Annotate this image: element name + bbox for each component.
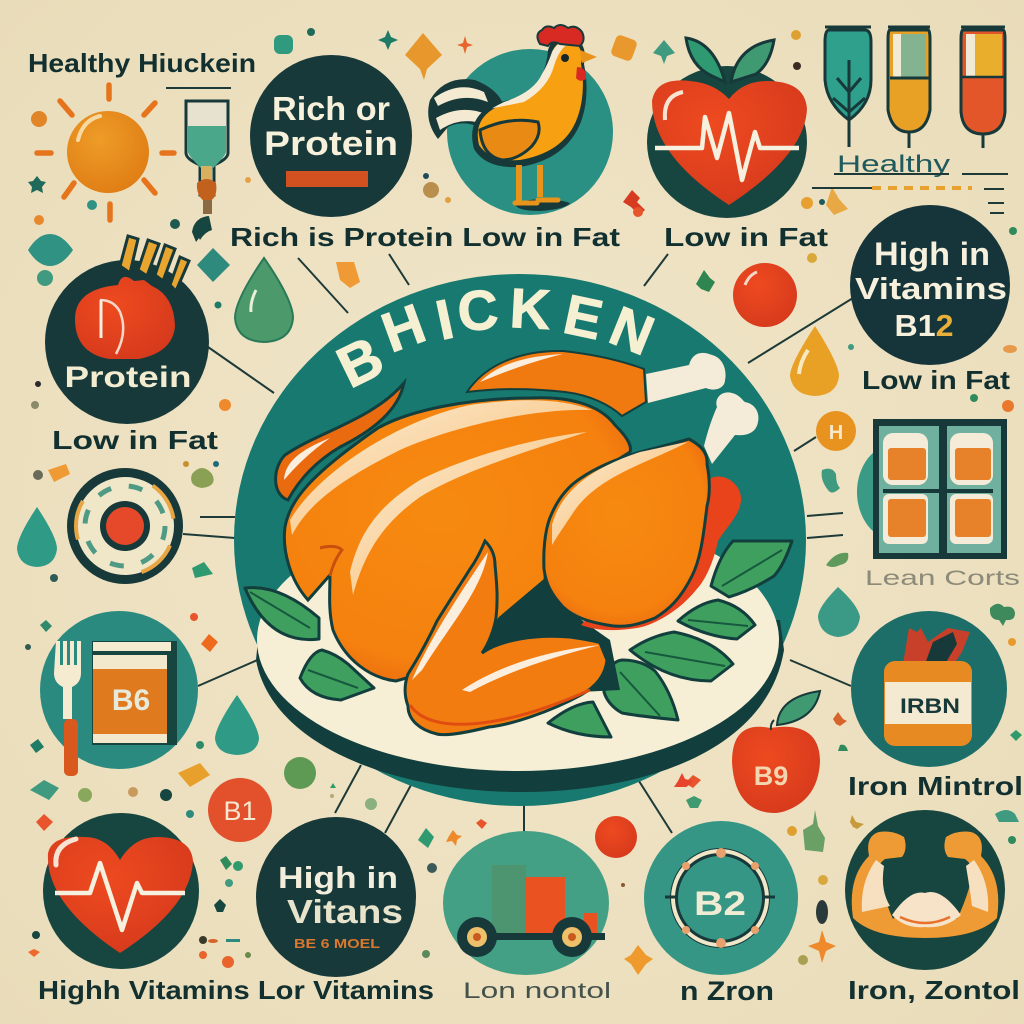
- red rim behind thigh: [581, 477, 741, 630]
- label: low in fat right: Low in Fat: [862, 365, 1010, 395]
- badge: high in vitamins b12: Vitamins: [855, 271, 1007, 306]
- badge: high in vitamins b12: [850, 205, 1010, 365]
- connector lines: [183, 254, 853, 833]
- bottom label: high vitamins: Highh Vitamins Lor Vitamins: [38, 975, 434, 1005]
- wing upper left: [276, 383, 404, 500]
- icon: test tubes: [825, 27, 1005, 148]
- label: healthy: [812, 151, 1008, 213]
- title arc: B: [327, 324, 393, 401]
- icon: cabinet of cuts: [857, 419, 1007, 559]
- icon: iron jar: [851, 611, 1007, 767]
- plate: [257, 509, 779, 771]
- badge: rich of protein: Rich or: [272, 90, 390, 127]
- label: iron mintrol: Iron Mintrol: [848, 771, 1023, 801]
- icon: heart with pulse: [647, 38, 807, 218]
- badge: protein: [45, 236, 209, 424]
- icon: small amber badge: [816, 411, 856, 451]
- lower wing: [405, 541, 607, 735]
- plate rim: [256, 620, 784, 792]
- icon: target dial: [67, 468, 183, 584]
- label: low in fat: Low in Fat: [664, 222, 828, 252]
- main plate circle: [234, 274, 806, 806]
- badge: high in vitans: [256, 817, 416, 977]
- title arc: [327, 276, 663, 401]
- icon: red ball: [733, 263, 797, 327]
- icon: apple b9: [732, 691, 820, 813]
- icon: water drop: [235, 258, 293, 342]
- icon: teal drop small: [215, 695, 259, 755]
- body: [284, 398, 630, 681]
- title arc: I: [430, 287, 459, 352]
- title arc: H: [374, 291, 433, 364]
- badge: rich of protein: [250, 55, 412, 217]
- badge: high in vitans: BE 6 MOEL: [294, 936, 380, 951]
- badge: b2: [644, 821, 798, 975]
- icon: amber drop: [790, 326, 839, 396]
- icon: teal drop: [17, 507, 57, 567]
- title arc: C: [455, 277, 500, 343]
- icon: teal drop right: [818, 587, 860, 637]
- badge: b2: B2: [694, 885, 746, 923]
- badge: high in vitans: Vitans: [287, 893, 403, 930]
- dark gap: [420, 525, 620, 700]
- bottom label: lon nontol: Lon nontol: [463, 978, 611, 1003]
- badge: b1: B1: [223, 796, 257, 826]
- badge: rich of protein: Protein: [264, 125, 398, 163]
- icon: small amber badge: H: [829, 422, 843, 444]
- icon: truck: [443, 831, 609, 975]
- badge: protein: Protein: [64, 361, 192, 394]
- title arc: E: [559, 282, 608, 352]
- icon: red ball small: [595, 816, 637, 858]
- icon: sun: [37, 85, 174, 220]
- icon: fork and b6 jar: B6: [112, 684, 150, 717]
- badge: b1: [208, 778, 272, 842]
- icon: fork and b6 jar: [40, 611, 198, 776]
- title arc: K: [508, 276, 552, 341]
- label: rich is protein low in fat: Rich is Protein Low in Fat: [230, 222, 620, 252]
- badge: high in vitamins b12: B12: [894, 308, 954, 343]
- icon: rooster: [428, 25, 613, 215]
- icon: iron jar: IRBN: [900, 695, 960, 718]
- back drumstick: [467, 351, 726, 416]
- label: lean corts: Lean Corts: [865, 567, 1020, 590]
- title arc: N: [602, 294, 663, 367]
- icon: muscles: [845, 810, 1005, 970]
- bottom label: iron zontol: Iron, Zontol: [848, 975, 1020, 1005]
- thigh: [544, 439, 709, 626]
- icon: heart badge: [43, 813, 199, 969]
- icon: apple b9: B9: [754, 761, 788, 791]
- top-left heading: Healthy Hiuckein: [28, 48, 256, 78]
- label: low in fat left: Low in Fat: [52, 425, 218, 455]
- bottom label: in zron: n Zron: [680, 976, 774, 1006]
- badge: high in vitans: High in: [278, 860, 398, 895]
- label: healthy: Healthy: [837, 151, 950, 178]
- icon: bottle: [166, 88, 231, 242]
- leaves: [245, 541, 792, 737]
- badge: high in vitamins b12: High in: [874, 236, 990, 272]
- front bone: [704, 392, 758, 464]
